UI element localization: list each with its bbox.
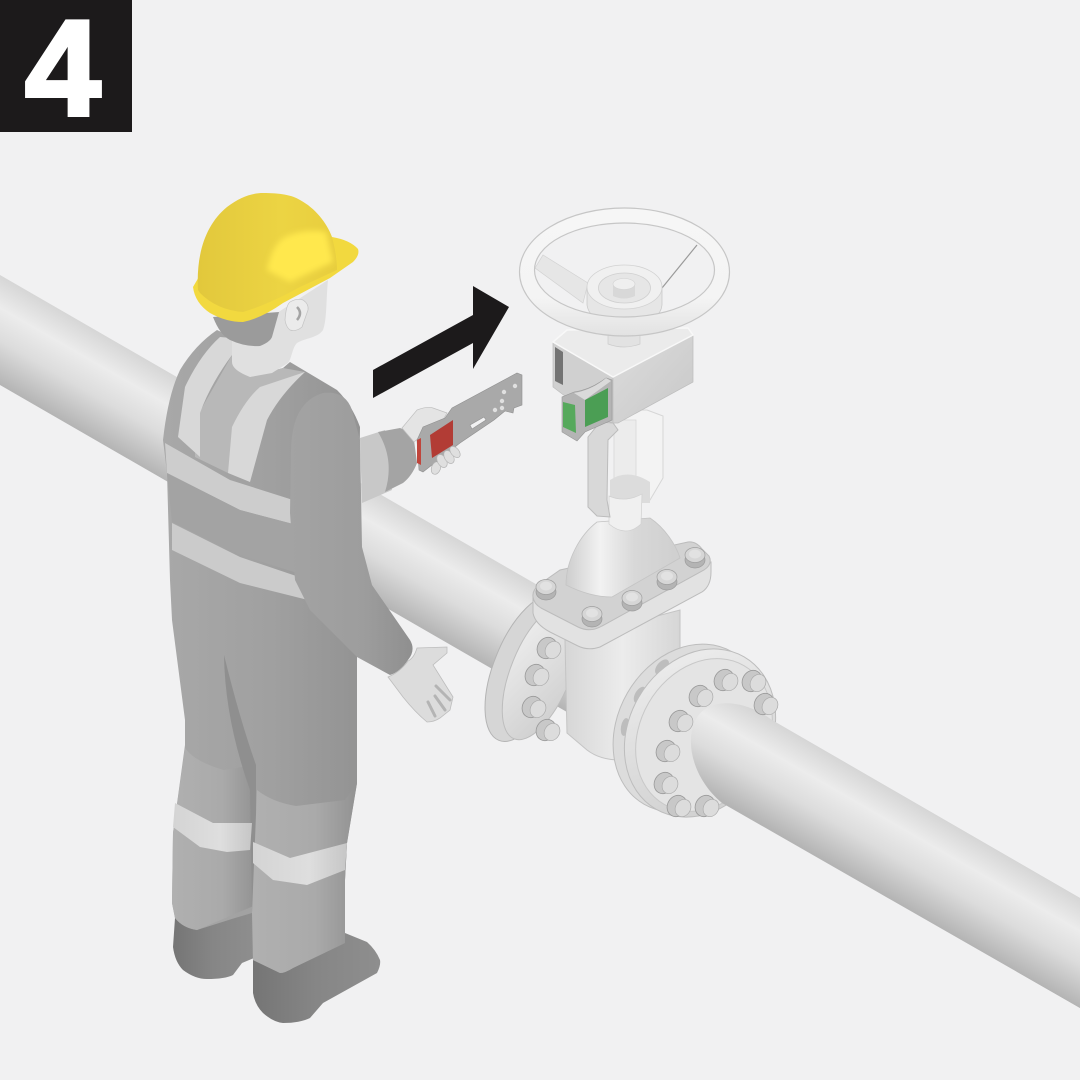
bonnet dome xyxy=(566,518,680,597)
wheel spokes xyxy=(535,245,697,347)
near arm xyxy=(290,393,413,675)
hat dome xyxy=(198,193,337,312)
flange neck and pipe continuation xyxy=(691,703,1080,1008)
step number badge xyxy=(0,0,132,144)
ear xyxy=(285,299,308,331)
right boot xyxy=(253,933,380,1023)
bonnet bolts xyxy=(536,548,705,627)
open glove hand xyxy=(388,647,453,722)
vest chest band xyxy=(165,443,293,524)
right pipe flange xyxy=(583,617,1080,1008)
vest waist band xyxy=(172,523,308,600)
vest lighter panel xyxy=(195,355,305,473)
hat brim xyxy=(193,237,358,322)
pipeline xyxy=(0,275,1080,1008)
vest shoulder stripe left xyxy=(178,337,232,457)
gate valve xyxy=(467,518,1080,1008)
metal plate xyxy=(417,373,522,472)
wheel rim xyxy=(520,208,730,336)
hat highlight xyxy=(267,231,333,282)
bonnet flange plate xyxy=(533,542,711,649)
indicator plate in hand xyxy=(402,373,522,476)
red closed indicator xyxy=(430,420,453,458)
plate holes xyxy=(493,384,517,412)
left knee reflective band xyxy=(173,803,252,852)
gearbox xyxy=(553,328,693,441)
head skin and neck xyxy=(232,280,328,377)
valve body xyxy=(565,610,680,760)
hair xyxy=(213,312,279,346)
left pipe flange xyxy=(467,583,596,753)
right knee reflective band xyxy=(253,842,347,885)
vest shoulder stripe right xyxy=(228,372,305,482)
left lower leg xyxy=(172,748,256,930)
red side strip xyxy=(417,438,421,465)
yoke and stem xyxy=(588,410,663,531)
fingers xyxy=(430,444,462,476)
worker xyxy=(163,193,522,1023)
left boot xyxy=(173,905,254,979)
gearbox right face xyxy=(613,335,693,423)
vest lower shading xyxy=(167,473,297,573)
right lower leg xyxy=(252,783,357,973)
position indicator: open (green) xyxy=(562,378,612,441)
hard hat xyxy=(193,193,358,322)
hand glove back xyxy=(402,407,447,442)
gearbox top face xyxy=(553,328,693,377)
gearbox window xyxy=(555,347,563,385)
leg gap shading xyxy=(224,655,256,960)
handwheel xyxy=(520,208,730,347)
gearbox left face xyxy=(553,342,613,423)
suit: torso and legs xyxy=(163,330,360,973)
direction arrow xyxy=(373,286,509,398)
wheel hub xyxy=(587,265,662,325)
forearm holding indicator xyxy=(360,428,417,503)
